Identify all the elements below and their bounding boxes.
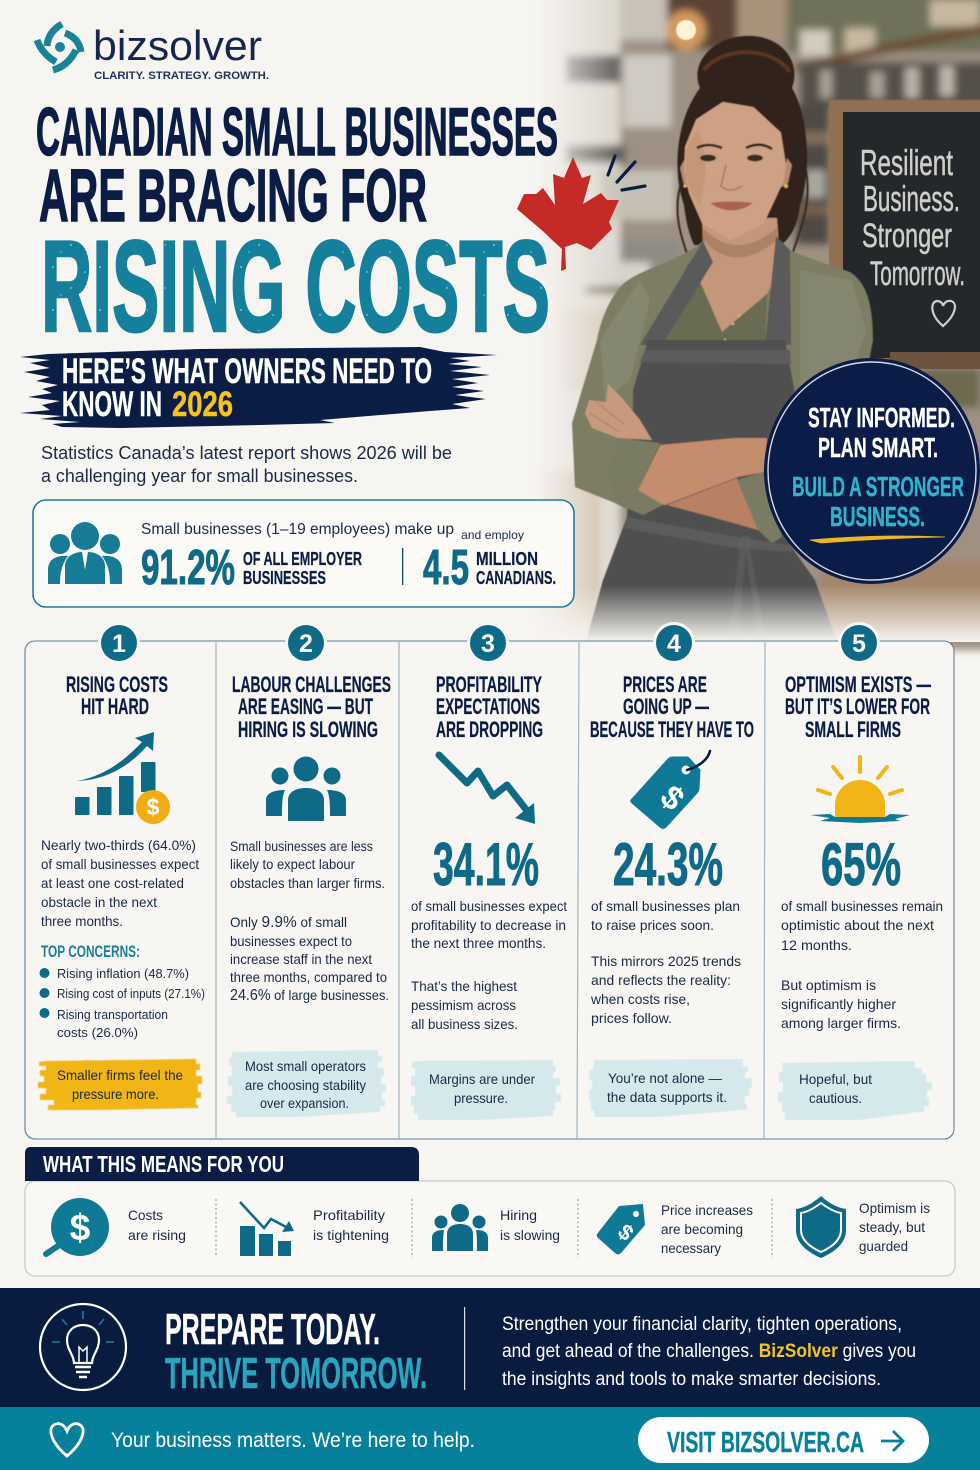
icon: maple leaf: [517, 156, 645, 271]
callout: pale brush: [778, 1061, 932, 1120]
item: costs are rising: $: [70, 1207, 91, 1248]
heading: [785, 672, 931, 742]
stat panel: small business share: 4.5: [423, 541, 469, 595]
top concerns list: Rising cost of inputs (27.1%): [57, 986, 205, 1001]
column 4: prices: [589, 622, 754, 1117]
heading: HIRING IS SLOWING: [238, 717, 378, 742]
item: profitability: [240, 1202, 389, 1256]
button: visit bizsolver: VISIT BIZSOLVER.CA: [667, 1427, 864, 1459]
chalkboard sign: [829, 100, 980, 369]
stat panel: small business share: 91.2%: [141, 541, 235, 595]
apron straps: [640, 241, 713, 345]
heading: ARE DROPPING: [436, 717, 543, 742]
subtitle brush banner: 2026: [172, 385, 233, 424]
supporting text: the insights and tools to make smarter decisions.: [502, 1369, 881, 1390]
body text: likely to expect labour: [230, 856, 355, 872]
body text: optimistic about the next: [781, 917, 934, 933]
item: price increases: $: [613, 1219, 639, 1246]
top concerns list: costs (26.0%): [57, 1025, 138, 1040]
body text: Nearly two-thirds (64.0%): [41, 837, 196, 853]
callout: yellow brush: Smaller firms feel the: [57, 1067, 183, 1083]
column 3: profitability: [411, 622, 567, 1120]
item: costs are rising: Costs: [128, 1207, 163, 1223]
call to action band: [0, 1288, 980, 1407]
item: hiring: is slowing: [500, 1227, 560, 1243]
icon: bar chart with rising arrow and coin: [75, 732, 170, 824]
callout: pale brush: [411, 1060, 561, 1120]
item: costs are rising: are rising: [128, 1227, 186, 1243]
body text: profitability to decrease in: [411, 917, 566, 933]
subtitle brush banner: HERE’S WHAT OWNERS NEED TO: [62, 352, 432, 391]
icon: price tag: $: [653, 778, 692, 817]
column 1: rising costs: [38, 622, 205, 1110]
body text: That’s the highest: [411, 978, 517, 994]
icon: people: [266, 756, 346, 821]
stat panel: small business share: CANADIANS.: [476, 568, 556, 588]
item: shield: steady, but: [859, 1219, 925, 1235]
heading: [165, 1305, 427, 1398]
body text: of small businesses remain: [781, 898, 943, 914]
icon: light bulb: [40, 1304, 126, 1390]
intro text: Statistics Canada’s latest report shows 2026 will be: [41, 442, 452, 463]
icon: group of people: [48, 522, 122, 584]
heading: LABOUR CHALLENGES: [232, 672, 391, 697]
body text: Only 9.9% of small: [230, 914, 347, 931]
intro text: a challenging year for small businesses.: [41, 465, 358, 486]
item: shield: guarded: [859, 1238, 908, 1254]
intro text: [41, 442, 452, 486]
number badge 2: 2: [299, 630, 313, 658]
logo: CLARITY. STRATEGY. GROWTH.: [94, 70, 269, 82]
item: costs are rising: [46, 1198, 186, 1256]
body text: to raise prices soon.: [591, 917, 714, 933]
number badge 3: [467, 622, 509, 664]
statistic: 65%: [821, 831, 901, 898]
top concerns list: Rising transportation: [57, 1007, 168, 1022]
stat panel: small business share: BUSINESSES: [243, 568, 326, 588]
number badge 4: 4: [667, 630, 681, 658]
heading: [436, 672, 543, 742]
body text: [781, 898, 943, 1031]
number badge 5: [838, 622, 880, 664]
stat panel: small business share: MILLION: [476, 549, 538, 569]
face: [680, 158, 792, 190]
heading: BECAUSE THEY HAVE TO: [590, 717, 754, 742]
neck and chest: [695, 218, 788, 332]
icon: heart: [51, 1424, 83, 1456]
heading: GOING UP —: [623, 694, 709, 719]
body text: Small businesses are less: [230, 838, 373, 854]
stat panel: small business share: OF ALL EMPLOYER: [243, 549, 362, 569]
circular badge: stay informed: [764, 358, 980, 584]
heading: [66, 672, 168, 719]
heading: PREPARE TODAY.: [165, 1305, 380, 1354]
heading: THRIVE TOMORROW.: [165, 1349, 427, 1398]
callout: pale brush: Margins are under: [429, 1071, 535, 1087]
body text: obstacle in the next: [41, 894, 157, 910]
callout: pale brush: the data supports it.: [607, 1089, 727, 1105]
supporting text: Strengthen your financial clarity, tighten operations,: [502, 1314, 902, 1335]
heading: [232, 672, 391, 742]
subtitle brush banner: [20, 347, 497, 428]
tab heading: [25, 1147, 419, 1181]
item: price increases: Price increases: [661, 1202, 753, 1218]
top concerns list: [40, 942, 205, 1040]
statistic: 24.3%: [613, 831, 723, 898]
body text: of small businesses expect: [41, 856, 199, 872]
callout: pale brush: Most small operators: [245, 1058, 366, 1074]
heading: EXPECTATIONS: [436, 694, 540, 719]
body text: significantly higher: [781, 996, 896, 1012]
body text: among larger firms.: [781, 1015, 901, 1031]
icon: falling arrow: [439, 755, 535, 824]
photo bottom fade: [500, 585, 980, 642]
stat panel: small business share: Small businesses (1–19 employees) make up: [141, 521, 454, 538]
heading: RISING COSTS: [66, 672, 168, 697]
button: visit bizsolver: [638, 1417, 929, 1463]
body text: increase staff in the next: [230, 951, 372, 967]
item: shield: [796, 1196, 930, 1258]
logo mark: [37, 24, 81, 70]
subtitle brush banner: KNOW IN: [62, 385, 162, 424]
callout: pale brush: pressure.: [454, 1090, 508, 1106]
body text: three months.: [41, 913, 123, 929]
callout: pale brush: are choosing stability: [245, 1077, 366, 1093]
callout: yellow brush: [38, 1059, 202, 1110]
body text: all business sizes.: [411, 1016, 518, 1032]
footer message: Your business matters. We’re here to help.: [111, 1429, 475, 1452]
item: hiring: Hiring: [500, 1207, 537, 1223]
heading: PROFITABILITY: [436, 672, 542, 697]
callout: pale brush: Hopeful, but: [799, 1071, 872, 1087]
item: price increases: necessary: [661, 1240, 721, 1256]
body text: and reflects the reality:: [591, 972, 731, 988]
number badge 1: 1: [112, 630, 126, 658]
body text: businesses expect to: [230, 933, 352, 949]
panel: five insight columns: [25, 622, 954, 1139]
logo: bizsolver: [93, 22, 262, 69]
number badge 1: [98, 622, 140, 664]
woman: [572, 36, 873, 645]
icon: sun on horizon: [810, 757, 910, 823]
body text: [411, 898, 567, 1032]
top concerns list: Rising inflation (48.7%): [57, 966, 189, 981]
body text: when costs rise,: [590, 991, 690, 1007]
number badge 3: 3: [481, 630, 495, 658]
body text: of small businesses plan: [591, 898, 740, 914]
hair back: [677, 36, 807, 245]
body text: 24.6% of large businesses.: [230, 987, 389, 1004]
icon: bar chart with rising arrow and coin: $: [147, 794, 160, 820]
body text: of small businesses expect: [411, 898, 567, 914]
heading: [590, 672, 754, 742]
item: shield: Optimism is: [859, 1200, 930, 1216]
heading: PRICES ARE: [623, 672, 707, 697]
body text: [230, 838, 389, 1004]
callout: pale brush: cautious.: [809, 1090, 862, 1106]
callout: pale brush: [589, 1059, 752, 1117]
top concerns list: TOP CONCERNS:: [41, 942, 140, 961]
item: hiring: [432, 1204, 560, 1251]
stat panel: small business share: and employ: [461, 528, 524, 542]
apron bib and skirt: [585, 340, 838, 645]
item: profitability: is tightening: [313, 1227, 389, 1243]
arms: [585, 384, 652, 440]
item: price increases: [597, 1202, 753, 1256]
circular badge: stay informed: BUSINESS.: [830, 501, 925, 532]
supporting text: and get ahead of the challenges. BizSolver gives you: [502, 1341, 916, 1362]
item: price increases: are becoming: [661, 1221, 743, 1237]
body text: the next three months.: [411, 935, 546, 951]
photo left fade: [500, 0, 625, 645]
icon: price tag: [631, 751, 710, 828]
body text: [590, 898, 741, 1026]
callout: pale brush: over expansion.: [260, 1095, 349, 1111]
heading: ARE EASING — BUT: [238, 694, 373, 719]
heading: HIT HARD: [81, 694, 149, 719]
footer band: [0, 1407, 980, 1470]
body text: pessimism across: [411, 997, 516, 1013]
body text: 12 months.: [781, 937, 852, 953]
logo: [37, 22, 269, 82]
body text: But optimism is: [781, 977, 876, 993]
body text: three months, compared to: [230, 969, 387, 985]
number badge 5: 5: [852, 630, 866, 658]
supporting text: [502, 1314, 916, 1390]
photo: shop owner in front of blurred store shelves: [500, 0, 980, 650]
item: profitability: Profitability: [313, 1207, 385, 1223]
body text: [41, 837, 199, 929]
shirt: [572, 241, 873, 545]
number badge 4: [653, 622, 695, 664]
tab heading: WHAT THIS MEANS FOR YOU: [43, 1151, 284, 1177]
title: [36, 94, 558, 359]
title: RISING COSTS: [41, 213, 550, 359]
callout: pale brush: [227, 1050, 386, 1117]
heading: SMALL FIRMS: [805, 717, 901, 742]
body text: at least one cost-related: [41, 875, 184, 891]
body text: This mirrors 2025 trends: [591, 953, 741, 969]
column 5: optimism: [778, 622, 943, 1120]
column 2: labour challenges: [227, 622, 391, 1117]
number badge 2: [285, 622, 327, 664]
body text: prices follow.: [591, 1010, 672, 1026]
stat panel: small business share: [33, 500, 574, 607]
panel: what this means for you: [25, 1147, 955, 1276]
title: ARE BRACING FOR: [39, 154, 427, 237]
statistic: 34.1%: [433, 831, 539, 898]
callout: pale brush: You’re not alone —: [608, 1070, 722, 1086]
callout: yellow brush: pressure more.: [72, 1086, 159, 1102]
body text: obstacles than larger firms.: [230, 875, 385, 891]
